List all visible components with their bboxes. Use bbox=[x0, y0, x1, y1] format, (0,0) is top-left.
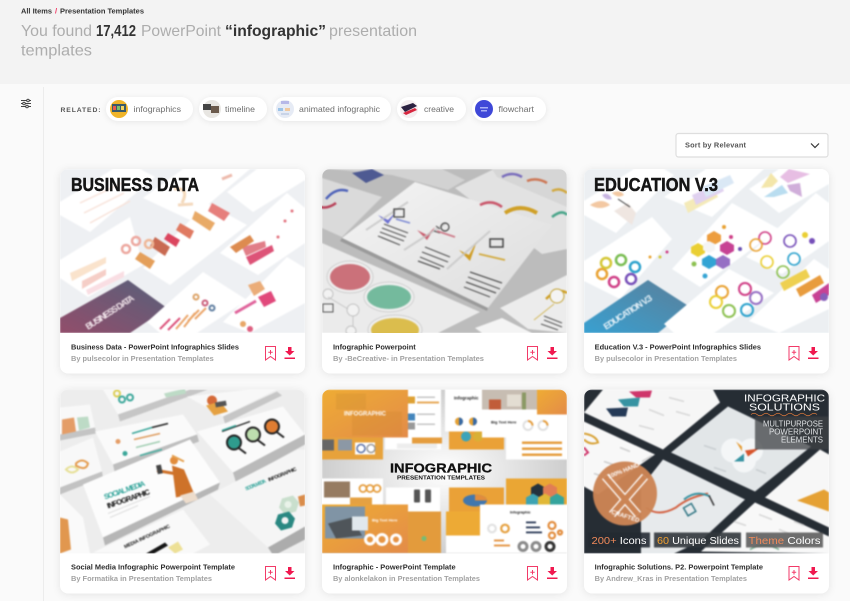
icon: download bbox=[808, 567, 818, 579]
tag: timeline bbox=[199, 97, 267, 121]
tag: creative: creative bbox=[424, 105, 454, 114]
thumbnail subheading: MULTIPURPOSE bbox=[763, 420, 823, 428]
tag: flowchart bbox=[472, 97, 546, 121]
thumbnail: Social Media: SOCIAL MEDIA bbox=[103, 479, 147, 501]
related label: RELATED: bbox=[60, 107, 100, 114]
tag: creative bbox=[397, 97, 466, 121]
card title: Infographic Solutions. P2. Powerpoint Template bbox=[595, 562, 763, 572]
thumbnail: Business Data: BUSINESS DATA bbox=[84, 293, 136, 332]
thumbnail: Infographic orange: Infographic bbox=[510, 510, 531, 514]
icon: download bbox=[284, 347, 295, 359]
card title: Social Media Infographic Powerpoint Template bbox=[71, 562, 235, 572]
thumbnail: Infographic orange: INFOGRAPHIC bbox=[344, 412, 387, 418]
thumbnail heading: SOLUTIONS bbox=[749, 402, 820, 414]
card author: By Andrew_Kras in Presentation Templates bbox=[595, 574, 747, 583]
icon: bookmark bbox=[528, 566, 538, 580]
sort dropdown: Sort by Relevant bbox=[685, 140, 747, 150]
header band bbox=[0, 0, 850, 84]
page heading: templates bbox=[21, 42, 92, 60]
thumbnail: Business Data bbox=[60, 169, 305, 333]
sidebar bbox=[21, 87, 44, 601]
icon: download bbox=[808, 347, 818, 359]
thumbnail title: EDUCATION V.3 bbox=[594, 174, 718, 195]
thumbnail subheading: POWERPOINT bbox=[769, 428, 823, 436]
icon: download bbox=[547, 567, 558, 579]
thumbnail feature labels bbox=[592, 536, 820, 546]
thumbnail feature labels: Theme Colors bbox=[748, 535, 820, 547]
icon: bookmark bbox=[266, 346, 276, 360]
icon: download bbox=[284, 567, 295, 579]
panel: Business Data card bbox=[60, 169, 305, 374]
panel: Social Media card bbox=[60, 388, 305, 594]
thumbnail heading bbox=[745, 394, 825, 410]
thumbnail heading: INFOGRAPHIC bbox=[390, 460, 493, 476]
panel: Infographic PowerPoint Template card bbox=[322, 390, 567, 594]
wavy accent bbox=[751, 413, 817, 416]
card author: By alonkelakon in Presentation Templates bbox=[333, 574, 480, 583]
panel: Education V.3 card bbox=[584, 169, 829, 374]
thumbnail heading bbox=[390, 463, 492, 480]
card author: By pulsecolor in Presentation Templates bbox=[595, 354, 737, 363]
tag: timeline: timeline bbox=[225, 105, 255, 114]
thumbnail title: BUSINESS DATA bbox=[71, 174, 199, 195]
icon: bookmark bbox=[528, 346, 538, 360]
page heading: 17,412 bbox=[96, 23, 136, 40]
thumbnail: Education V.3 bbox=[584, 169, 829, 333]
thumbnail: Social Media: INFOGRAPHIC bbox=[106, 487, 152, 510]
thumbnail subheading bbox=[764, 420, 823, 442]
thumbnail: Infographic Solutions: 100% HAND bbox=[608, 462, 641, 480]
thumbnail: Social Media: INFOGRAPHIC bbox=[268, 466, 298, 483]
tag: animated infographic bbox=[273, 97, 391, 121]
thumbnail: Social Media: SOCIAL MEDIA bbox=[245, 478, 267, 492]
thumbnail: Social Media bbox=[60, 388, 305, 554]
breadcrumb: Presentation Templates bbox=[60, 6, 144, 16]
card title: Business Data - PowerPoint Infographics Slides bbox=[71, 342, 239, 352]
card title: Education V.3 - PowerPoint Infographics Slides bbox=[595, 342, 761, 352]
icon: bookmark bbox=[789, 346, 799, 360]
icon: bookmark bbox=[266, 566, 276, 580]
card author: By pulsecolor in Presentation Templates bbox=[71, 354, 214, 363]
icon: download bbox=[547, 347, 558, 359]
thumbnail: Infographic Powerpoint bbox=[320, 169, 567, 345]
page heading: PowerPoint bbox=[141, 23, 222, 40]
panel: Infographic Solutions card bbox=[584, 390, 829, 594]
thumbnail: Education V.3: EDUCATION V.3 bbox=[602, 293, 654, 332]
tag: infographics bbox=[106, 97, 193, 121]
thumbnail: Infographic orange: Big Text Here bbox=[491, 420, 517, 424]
thumbnail feature labels: 60 Unique Slides bbox=[657, 535, 739, 547]
page heading: presentation bbox=[329, 23, 417, 40]
thumbnail: Social Media: MEDIA INFOGRAPHIC bbox=[123, 524, 172, 550]
page heading: “infographic” bbox=[225, 23, 326, 40]
thumbnail: Infographic Solutions bbox=[584, 390, 829, 554]
breadcrumb: All Items bbox=[21, 6, 52, 16]
thumbnail: Infographic orange bbox=[322, 390, 567, 554]
panel: Infographic Powerpoint card bbox=[320, 169, 567, 374]
icon: bookmark bbox=[789, 566, 799, 580]
thumbnail: Infographic orange: Infographic bbox=[454, 396, 479, 400]
card author: By Formatika in Presentation Templates bbox=[71, 574, 212, 583]
card author: By -BeCreative- in Presentation Templates bbox=[333, 354, 484, 363]
related tags bbox=[60, 97, 546, 121]
thumbnail subheading: ELEMENTS bbox=[781, 436, 824, 444]
thumbnail heading: INFOGRAPHIC bbox=[744, 394, 825, 404]
thumbnail: Infographic orange: Big Text Here bbox=[372, 518, 398, 522]
page heading bbox=[21, 23, 417, 60]
thumbnail: Infographic Solutions: CRAFTED bbox=[610, 510, 640, 525]
page heading: You found bbox=[21, 23, 92, 40]
card title: Infographic - PowerPoint Template bbox=[333, 562, 456, 572]
card title: Infographic Powerpoint bbox=[333, 342, 416, 352]
tag: animated infographic: animated infographic bbox=[299, 105, 380, 114]
breadcrumb bbox=[21, 6, 144, 16]
icon: chevron down bbox=[811, 144, 819, 148]
tag: flowchart: flowchart bbox=[498, 105, 535, 114]
thumbnail heading: PRESENTATION TEMPLATES bbox=[397, 476, 485, 482]
icon: filter sliders bbox=[21, 99, 31, 108]
thumbnail feature labels: 200+ Icons bbox=[592, 535, 646, 547]
tag: infographics: infographics bbox=[134, 105, 181, 114]
breadcrumb: / bbox=[55, 6, 57, 16]
sort dropdown bbox=[676, 134, 828, 157]
